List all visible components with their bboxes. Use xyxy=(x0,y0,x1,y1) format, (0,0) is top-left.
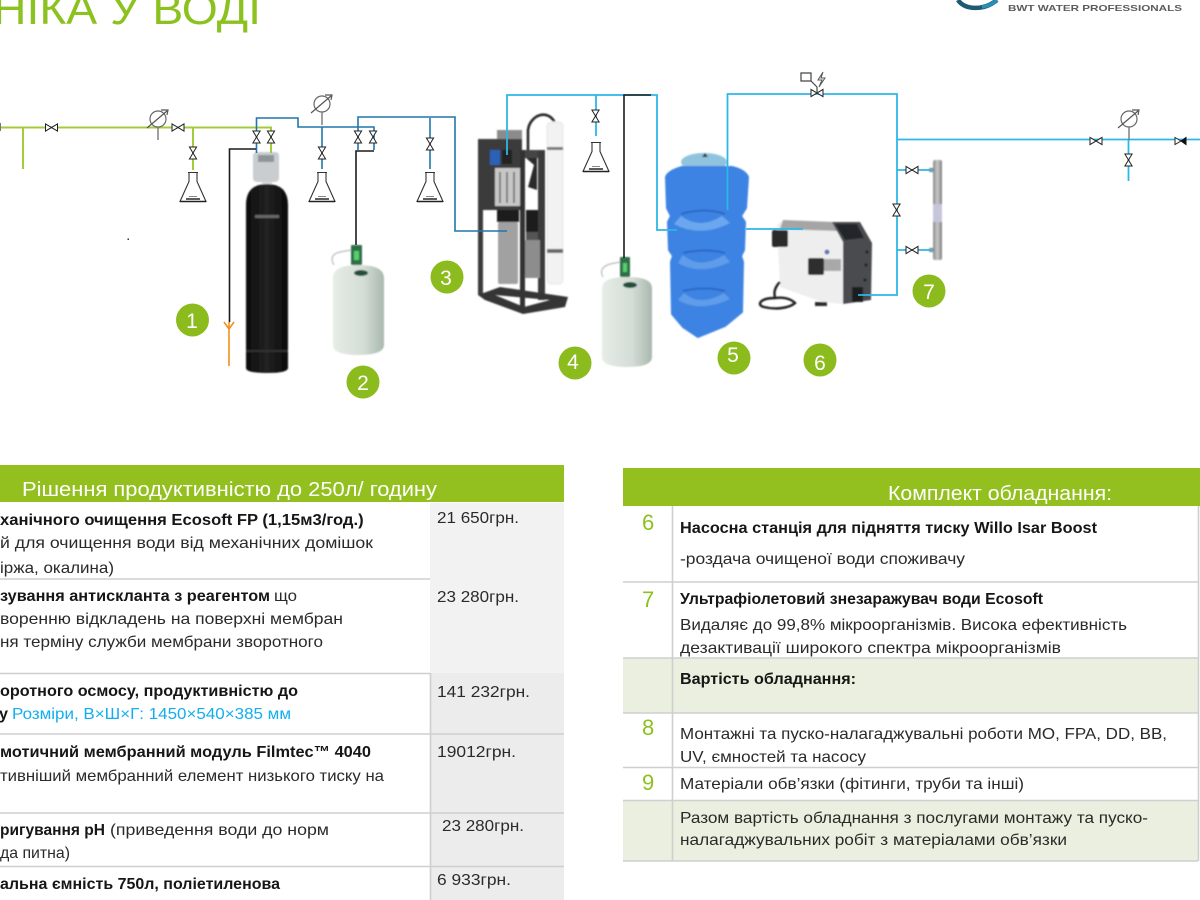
row 2: antiscalant dosing: ня терміну служби мембрани зворотного xyxy=(0,634,323,651)
equipment 6: booster pump station xyxy=(760,220,872,308)
row 1: mechanical filter: й для очищення води від механічних домішок xyxy=(0,535,374,552)
row 5: pH correction xyxy=(0,818,524,862)
row 3: reverse osmosis unit: 141 232грн. xyxy=(437,684,530,701)
number badge 6: 6 xyxy=(814,352,826,375)
row 5: pH correction: да питна) xyxy=(0,845,70,862)
row 1: mechanical filter xyxy=(0,510,519,577)
price column background xyxy=(0,503,564,900)
black drain and dosing lines xyxy=(230,95,651,322)
equipment 4: pH dosing tank xyxy=(602,257,652,367)
row: equipment cost: Вартість обладнання: xyxy=(680,671,856,688)
number badge 2 xyxy=(346,366,380,398)
table header: Рішення продуктивністю до 250л/ годину xyxy=(22,479,437,501)
equipment 1: mechanical filter xyxy=(246,152,288,373)
row 1: mechanical filter: 21 650грн. xyxy=(437,510,519,527)
equipment 7: UV steriliser xyxy=(929,160,942,260)
pressure gauges xyxy=(147,95,1139,140)
equipment 3: reverse osmosis unit xyxy=(478,115,568,314)
number badge 5: 5 xyxy=(727,344,739,367)
row 9: piping materials: Матеріали обв’язки (фітинги, труби та інші) xyxy=(680,776,1024,793)
shaded rows and grid xyxy=(623,506,1198,861)
valves xyxy=(46,89,1186,254)
row 2: antiscalant dosing: зування антискланта з реагентом xyxy=(0,588,270,605)
row 4: membrane module: мотичний мембранний модуль Filmtec™ 4040 xyxy=(0,744,371,761)
row 8: installation work xyxy=(642,715,1167,766)
row 6: booster pump: -роздача очищеної води споживачу xyxy=(680,551,965,568)
number badge 2: 2 xyxy=(357,372,369,395)
logo: BWT: BWT WATER PROFESSIONALS xyxy=(1008,3,1182,13)
row 1: mechanical filter: ханічного очищення Ecosoft FP (1,15м3/год.) xyxy=(0,512,364,529)
row 4: membrane module: тивніший мембранний елемент низького тиску на xyxy=(0,768,384,785)
row 2: antiscalant dosing xyxy=(0,588,519,651)
row 2: antiscalant dosing: що xyxy=(274,588,297,605)
row 7: UV steriliser: Ультрафіолетовий знезаражувач води Ecosoft xyxy=(680,591,1044,608)
light blue pipework xyxy=(507,94,1200,295)
table header: Комплект обладнання: xyxy=(888,483,1112,505)
row 6: booster pump: 6 xyxy=(642,510,654,535)
number badge 7: 7 xyxy=(923,281,935,304)
number badge 1: 1 xyxy=(186,310,198,333)
equipment 5: blue storage tank xyxy=(666,153,748,337)
row 6: booster pump: Насосна станція для підняття тиску Willo Isar Boost xyxy=(680,520,1098,537)
number badge 1 xyxy=(176,304,209,336)
row 7: UV steriliser: Видаляє до 99,8% мікроорганізмів. Висока ефективність xyxy=(680,617,1127,634)
row 6: booster pump xyxy=(642,510,1098,568)
row 1: mechanical filter: іржа, окалина) xyxy=(0,560,114,577)
row 6: storage tank: альна ємність 750л, поліетиленова xyxy=(0,876,280,893)
row 6: storage tank: 6 933грн. xyxy=(437,872,511,889)
blue pipework after filter xyxy=(256,117,507,231)
row 6: storage tank xyxy=(0,872,511,893)
row 7: UV steriliser xyxy=(642,587,1127,657)
panel: equipment set table xyxy=(623,468,1200,861)
row: total xyxy=(680,810,1148,849)
row: total: налагаджувальних робіт з матеріалами обв’язки xyxy=(680,832,1067,849)
sampling flasks xyxy=(180,142,609,202)
row 3: reverse osmosis unit: оротного осмосу, продуктивністю до xyxy=(0,683,298,700)
panel: left price table xyxy=(0,465,564,900)
row 5: pH correction: ригування рН xyxy=(0,822,105,839)
row 8: installation work: UV, ємностей та насосу xyxy=(680,749,866,766)
table header xyxy=(623,468,1200,506)
stray dot xyxy=(128,238,129,240)
number badge 3 xyxy=(430,260,464,294)
row 3: reverse osmosis unit: Розміри, В×Ш×Г: 1450×540×385 мм xyxy=(12,706,291,723)
row 7: UV steriliser: 7 xyxy=(642,587,654,612)
number badge 6 xyxy=(804,344,836,376)
row 5: pH correction: (приведення води до норм xyxy=(110,822,329,839)
row 9: piping materials: 9 xyxy=(642,770,654,795)
row 8: installation work: Монтажні та пуско-налагаджувальні роботи МО, FPA, DD, BB, xyxy=(680,726,1167,743)
row: total: Разом вартість обладнання з послугами монтажу та пуско- xyxy=(680,810,1148,827)
number badge 5 xyxy=(718,342,750,374)
equipment 2: antiscalant dosing tank xyxy=(332,245,384,355)
row 8: installation work: 8 xyxy=(642,715,654,740)
row 3: reverse osmosis unit xyxy=(0,683,530,723)
logo: BWT xyxy=(958,0,1182,13)
drain outlet xyxy=(224,322,234,366)
row 2: antiscalant dosing: воренню відкладень на поверхні мембран xyxy=(0,611,343,628)
number badge 7 xyxy=(912,274,946,308)
row 2: antiscalant dosing: 23 280грн. xyxy=(437,589,519,606)
number badge 4 xyxy=(558,346,592,380)
actuator symbol xyxy=(801,72,825,92)
row 5: pH correction: 23 280грн. xyxy=(442,818,524,835)
number badge 3: 3 xyxy=(440,267,452,290)
green inlet pipework xyxy=(0,123,271,170)
table header xyxy=(0,465,564,502)
row 4: membrane module: 19012грн. xyxy=(437,744,516,761)
row 7: UV steriliser: дезактивації широкого спектра мікроорганізмів xyxy=(680,640,1061,657)
row 4: membrane module xyxy=(0,744,516,785)
number badge 4: 4 xyxy=(567,351,579,374)
row 9: piping materials xyxy=(642,770,1024,795)
